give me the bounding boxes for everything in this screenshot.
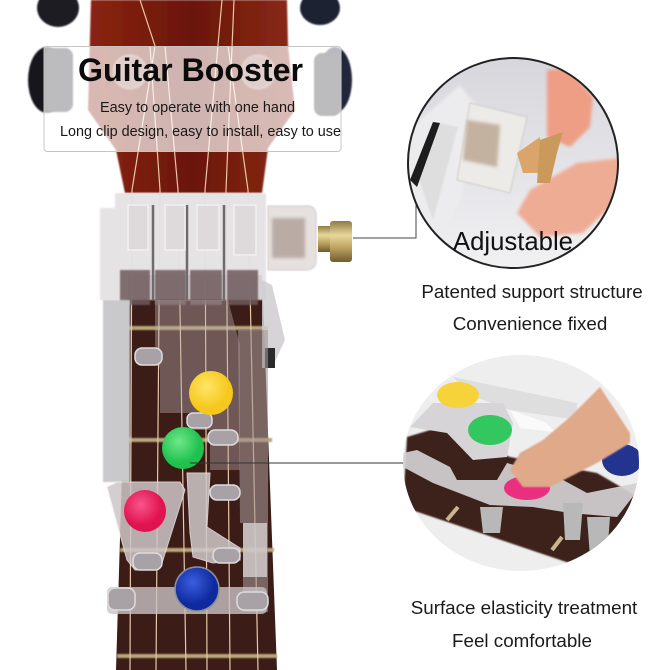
caption: Adjustable xyxy=(453,228,573,256)
black clip edge xyxy=(410,122,440,187)
left rail xyxy=(103,300,130,482)
pink button xyxy=(124,490,166,532)
central rail xyxy=(187,473,240,563)
translucent clip device xyxy=(100,193,352,614)
triangle pad xyxy=(107,482,185,570)
tuner shadows xyxy=(45,48,341,116)
yellow cap xyxy=(437,382,479,408)
feature text: fixed: Convenience fixed xyxy=(453,313,607,334)
detail circle: finger press xyxy=(400,350,645,575)
guitar photo xyxy=(28,0,352,670)
clear back bar xyxy=(453,377,577,420)
subtitle line two: Long clip design, easy to install, easy to use xyxy=(60,124,341,140)
brass thumbscrew xyxy=(318,221,352,262)
frets xyxy=(117,328,277,656)
callout line: adjuster xyxy=(353,200,416,238)
pink cap xyxy=(504,476,550,500)
blue cap xyxy=(602,444,642,476)
adjuster housing xyxy=(268,206,316,270)
dark fretboard xyxy=(403,427,638,570)
feature text: elasticity: Surface elasticity treatment xyxy=(411,597,638,618)
clip top four fingers xyxy=(100,193,266,305)
backdrop xyxy=(400,350,645,575)
small tabs xyxy=(108,348,268,610)
housing interior xyxy=(463,120,500,167)
blue button xyxy=(175,567,219,611)
callout line: green button xyxy=(190,462,403,464)
upper finger xyxy=(547,68,593,147)
yellow button xyxy=(189,371,233,415)
subtitle line one: Easy to operate with one hand xyxy=(100,100,295,116)
detail circle: adjustable xyxy=(405,55,625,275)
lower bracket xyxy=(243,523,267,577)
strings xyxy=(130,0,258,670)
upper translucent plates xyxy=(155,300,240,470)
clear front plate xyxy=(403,450,638,517)
headstock xyxy=(88,0,295,193)
white slab xyxy=(417,123,458,220)
green button pad xyxy=(410,403,513,460)
side arm xyxy=(262,280,285,368)
clear housing xyxy=(457,103,527,193)
feature text: comfort: Feel comfortable xyxy=(452,630,592,651)
fret highlights xyxy=(447,507,562,550)
circle photo xyxy=(409,59,617,267)
black arm block xyxy=(265,348,275,368)
right rail xyxy=(238,330,268,612)
thumb xyxy=(517,158,622,237)
tuner washers xyxy=(113,55,275,89)
gold screw collar xyxy=(517,137,543,173)
bottom bar xyxy=(107,587,267,614)
clip feet xyxy=(480,503,610,551)
heading: Guitar Booster xyxy=(78,52,303,88)
translucent panel xyxy=(44,46,341,152)
white window xyxy=(510,410,555,432)
finger xyxy=(510,387,630,487)
title box xyxy=(44,46,341,152)
green cap xyxy=(468,415,512,445)
housing thread detail xyxy=(272,218,305,258)
circle outline xyxy=(408,58,618,268)
tuning pegs xyxy=(28,0,352,113)
fretboard xyxy=(116,275,277,670)
green button xyxy=(162,427,204,469)
feature text: support: Patented support structure xyxy=(421,281,643,302)
gold knurl xyxy=(537,132,563,183)
